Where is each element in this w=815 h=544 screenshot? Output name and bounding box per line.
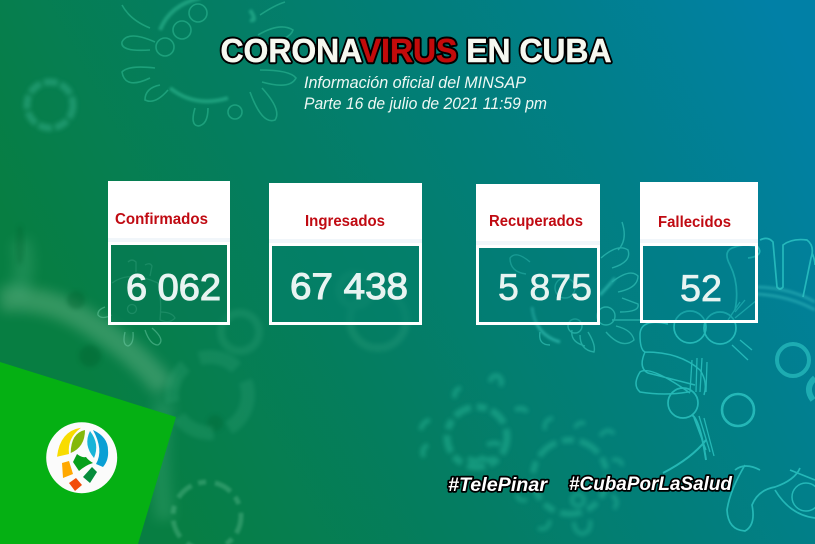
subtitle: Parte 16 de julio de 2021 11:59 pm	[304, 95, 547, 113]
panel: Confirmados: Confirmados	[115, 211, 208, 228]
hashtags: #CubaPorLaSalud	[569, 474, 732, 495]
background virus: behind Confirmados	[98, 260, 175, 346]
hashtags	[448, 474, 732, 496]
subtitle	[304, 74, 547, 113]
hashtags: #TelePinar	[448, 475, 549, 496]
background virus: left large blurred	[0, 225, 223, 520]
background virus: lower right large	[636, 238, 815, 531]
hashtags: #CubaPorLaSalud	[569, 474, 732, 495]
panel: Confirmados	[108, 181, 230, 324]
panel: Fallecidos: 52	[680, 267, 722, 309]
background virus: top left small	[27, 82, 73, 128]
icon: TelePinar logo	[46, 422, 117, 493]
background virus: bottom centre pair	[421, 376, 622, 534]
panel: Confirmados: 6 062	[126, 266, 221, 308]
panel: Recuperados: 5 875	[498, 266, 592, 308]
title: CORONAVIRUS EN CUBA	[220, 33, 612, 70]
background virus: blurred behind and below Ingresados	[172, 274, 406, 433]
panel: Recuperados: Recuperados	[489, 213, 583, 230]
panel: Ingresados: Ingresados	[305, 213, 385, 230]
background virus: top centre	[122, 0, 296, 126]
panel: Fallecidos	[640, 182, 758, 322]
panel: Recuperados	[476, 184, 600, 324]
green corner panel	[0, 362, 176, 544]
title: CORONAVIRUS EN CUBA	[220, 33, 612, 70]
hashtags: #TelePinar	[448, 475, 549, 496]
panel: Fallecidos: Fallecidos	[658, 214, 731, 231]
panel: Ingresados	[269, 183, 422, 324]
background virus: bottom-left ring	[173, 482, 241, 544]
subtitle: Información oficial del MINSAP	[304, 74, 526, 92]
panel: Ingresados: 67 438	[290, 265, 408, 307]
background virus: centre behind Recuperados	[510, 222, 640, 352]
